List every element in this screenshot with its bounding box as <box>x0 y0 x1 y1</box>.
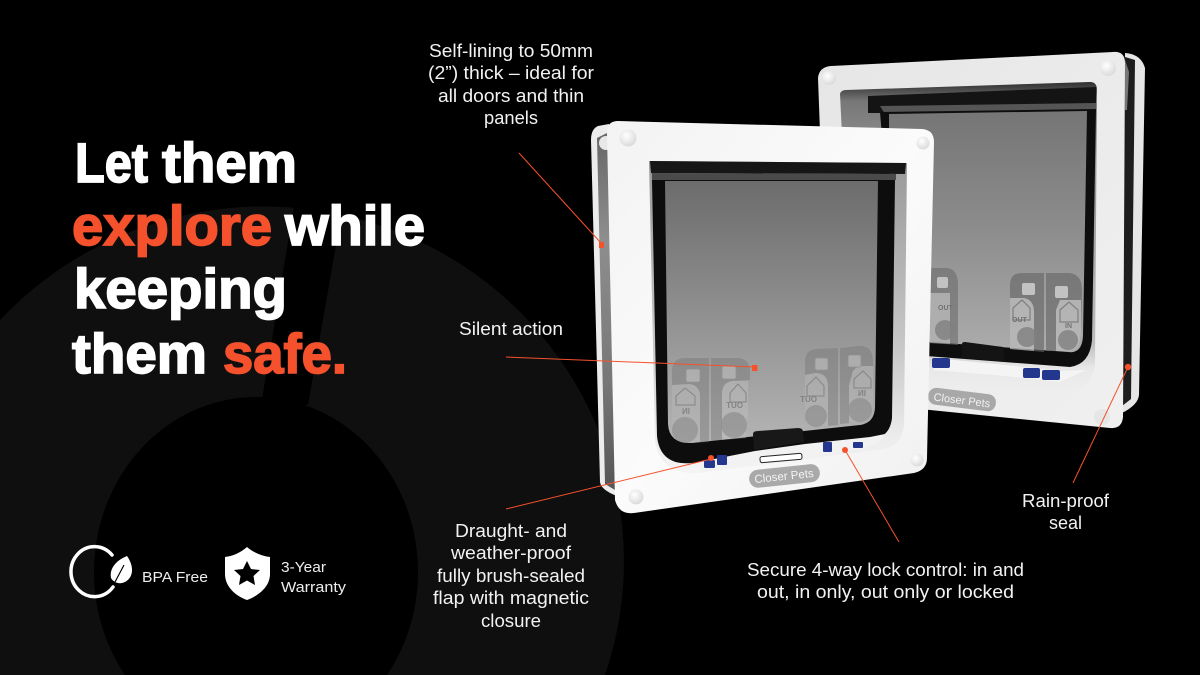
product: rear pet door <box>818 52 1145 428</box>
title: them <box>72 322 207 385</box>
front door lock panels: OUT <box>726 401 743 410</box>
callout text: flap with magnetic <box>433 587 589 608</box>
icon: ring with leaf <box>71 547 132 597</box>
callout text: (2”) thick – ideal for <box>428 62 594 83</box>
rear door side seal <box>1122 53 1145 413</box>
rear door frame <box>818 52 1125 428</box>
pointer line <box>842 447 899 542</box>
label: 3-Year Warranty <box>281 559 347 596</box>
pointer line <box>506 455 714 509</box>
front door lock panels: OUT <box>800 395 817 404</box>
rear door lock panels: IN <box>1065 323 1072 330</box>
rear door handle <box>962 342 1005 362</box>
rear door opening <box>840 82 1097 397</box>
callout text: weather-proof <box>450 542 572 563</box>
callout: 4-way lock <box>747 447 1024 602</box>
callout: silent action <box>459 318 758 371</box>
front door flap rim <box>652 180 895 463</box>
icon: shield with star <box>225 547 270 600</box>
callout text: seal <box>1049 512 1082 533</box>
callout: self-lining <box>428 40 604 248</box>
callout text: fully brush-sealed <box>437 565 585 586</box>
rear door lock panels: OUT <box>1012 317 1028 324</box>
front door rivets <box>620 130 930 504</box>
pointer line <box>1073 364 1131 483</box>
callout text: all doors and thin <box>438 85 584 106</box>
title: while <box>284 194 425 257</box>
callout text: Silent action <box>459 318 563 339</box>
rear door flap <box>889 111 1087 352</box>
front door handle <box>753 428 804 450</box>
label: BPA Free: BPA Free <box>142 569 208 586</box>
label: 3-Year Warranty: Warranty <box>281 579 347 596</box>
pointer line <box>519 153 604 248</box>
label: 3-Year Warranty: 3-Year <box>281 559 326 576</box>
front door sill and latches <box>694 434 885 472</box>
product: front pet door <box>591 121 934 513</box>
title: keeping <box>74 257 287 320</box>
front door lock panels: IN <box>858 389 866 398</box>
callout text <box>1022 490 1110 533</box>
front door flap <box>665 181 878 443</box>
callout text: out, in only, out only or locked <box>757 581 1014 602</box>
front door side seal <box>591 124 617 496</box>
front door logo plate <box>748 463 821 489</box>
pointer line <box>506 357 758 371</box>
callout text <box>433 520 589 631</box>
rear door logo plate: Closer Pets <box>933 392 991 410</box>
front door frame <box>607 121 934 513</box>
callout text: closure <box>481 610 541 631</box>
front door opening <box>649 161 907 473</box>
title <box>72 131 425 385</box>
callout: draught and weather proof <box>433 455 714 631</box>
callout text: Draught- and <box>455 520 567 541</box>
rear door lock panels <box>930 268 1082 352</box>
rear door top band <box>868 87 1096 113</box>
badge: BPA Free <box>71 547 208 597</box>
title: Let <box>75 131 148 194</box>
rear door rivets <box>822 60 1116 425</box>
front door lock panels: IN <box>682 407 690 416</box>
callout text <box>747 559 1024 602</box>
callout text: Self-lining to 50mm <box>429 40 593 61</box>
callout text: Secure 4-way lock control: in and <box>747 559 1024 580</box>
rear door lock panels: OUT <box>938 305 954 312</box>
callout text: panels <box>484 107 538 128</box>
title: them <box>162 131 297 194</box>
front door top band <box>650 161 906 174</box>
front door lock panels <box>672 346 873 443</box>
badge: 3-Year Warranty <box>225 547 347 600</box>
front door logo plate: Closer Pets <box>754 468 815 486</box>
callout text <box>428 40 594 128</box>
rear door logo plate <box>927 387 997 412</box>
rear door flap rim <box>880 109 1096 367</box>
title: safe. <box>223 322 347 385</box>
title: explore <box>72 194 272 257</box>
callout text: Rain-proof <box>1022 490 1110 511</box>
rear door sill and latches <box>932 358 1086 382</box>
callout: rain-proof seal <box>1022 364 1131 533</box>
